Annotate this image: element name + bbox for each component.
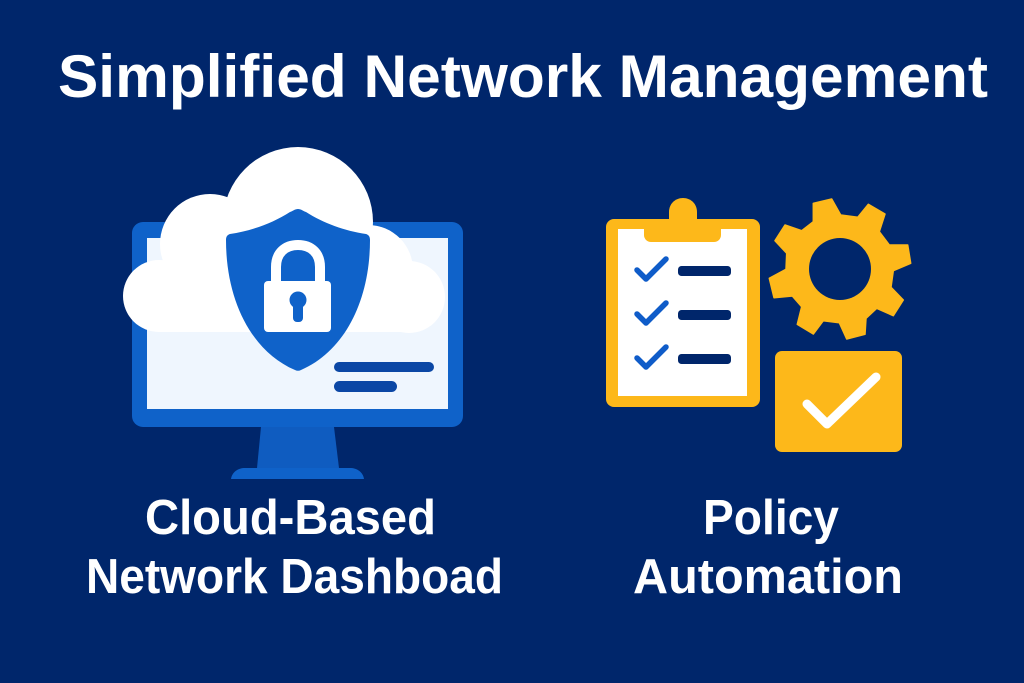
icon: clipboard [606, 198, 760, 407]
icon: padlock [264, 245, 331, 332]
label: policy automation [633, 491, 903, 604]
checklist row 2 [637, 303, 731, 323]
icon: dashboard text lines [334, 362, 434, 392]
icon: check box [775, 351, 902, 452]
label: policy automation: Policy [703, 491, 839, 545]
icon: gear [769, 199, 911, 339]
icon: shield [226, 209, 370, 371]
label: policy automation: Automation [633, 550, 903, 604]
checklist row 3 [637, 347, 731, 367]
checklist row 1 [637, 259, 731, 279]
label: cloud-based network dashboard [86, 491, 503, 604]
title: Simplified Network Management [58, 43, 988, 110]
panel: cloud-based network dashboard illustration [123, 147, 463, 479]
label: cloud-based network dashboard: Network Dashboad [86, 550, 503, 604]
panel: policy automation illustration [606, 198, 911, 452]
label: cloud-based network dashboard: Cloud-Based [145, 491, 436, 545]
icon: monitor [132, 222, 463, 479]
icon: cloud [123, 147, 445, 333]
